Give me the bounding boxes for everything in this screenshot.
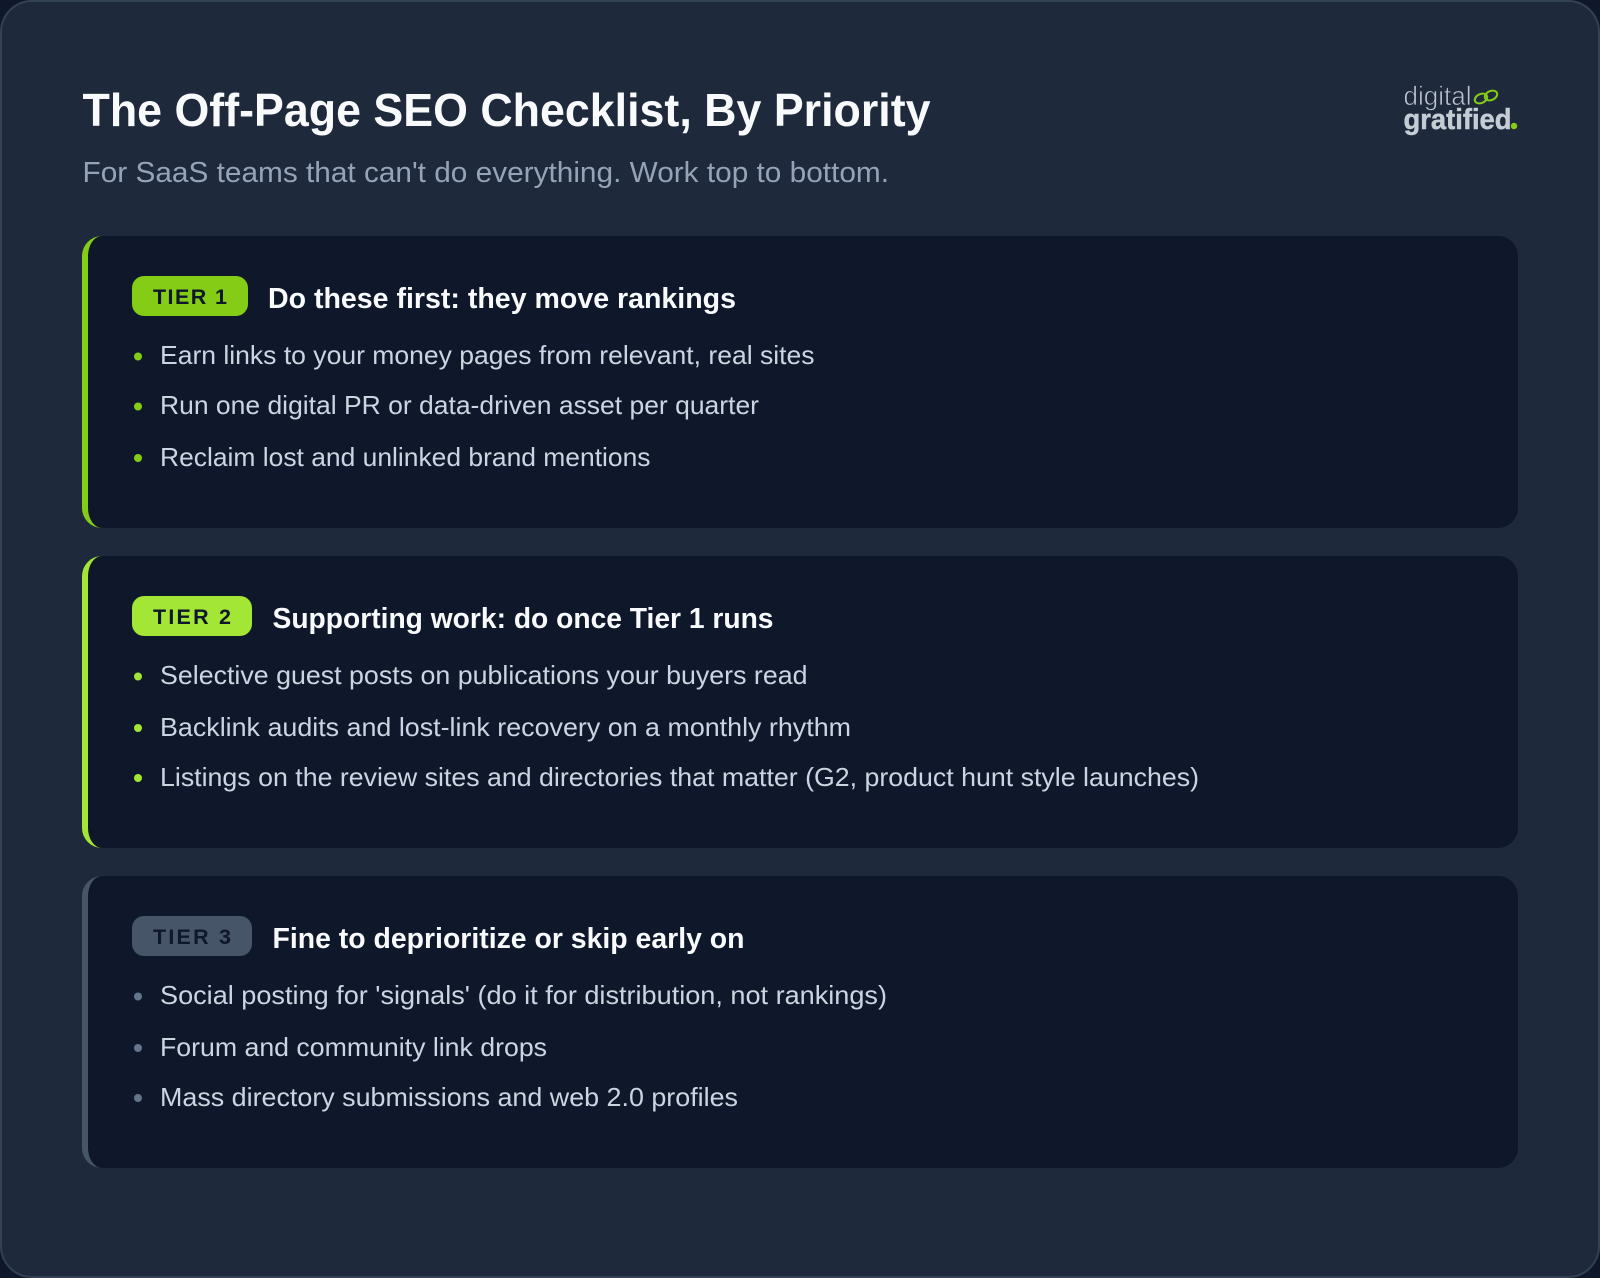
- card background: [88, 236, 1518, 528]
- badge: tier 3: [132, 916, 252, 956]
- list: tier 1: Run one digital PR or data-driven asset per quarter: [160, 390, 759, 420]
- panel: tier 3: [82, 876, 1518, 1168]
- heading: tier 1: Do these first: they move rankings: [268, 283, 736, 315]
- card accent: [82, 876, 102, 1168]
- list: tier 1: [134, 340, 814, 472]
- list: tier 3: Forum and community link drops: [160, 1032, 547, 1062]
- logo: digital gratified: [1404, 81, 1517, 136]
- list: tier 3: [134, 980, 887, 1112]
- card background: [88, 876, 1518, 1168]
- badge: tier 3: TIER 3: [153, 925, 231, 949]
- header: [82, 84, 931, 189]
- badge: tier 1: [132, 276, 248, 316]
- list: tier 2: Selective guest posts on publications your buyers read: [160, 660, 808, 690]
- list: tier 2: Backlink audits and lost-link recovery on a monthly rhythm: [160, 712, 851, 742]
- list: tier 2: [134, 660, 1199, 792]
- list: tier 1: Earn links to your money pages from relevant, real sites: [160, 340, 814, 370]
- badge: tier 2: [132, 596, 252, 636]
- card accent: [82, 556, 102, 848]
- logo word: digital: digital: [1404, 81, 1472, 111]
- logo word: gratified: gratified: [1404, 104, 1512, 136]
- badge: tier 2: TIER 2: [153, 605, 231, 629]
- list: tier 2: Listings on the review sites and directories that matter (G2, product hunt style launches): [160, 762, 1199, 792]
- badge: tier 1: TIER 1: [153, 285, 227, 309]
- panel: tier 1: [82, 236, 1518, 528]
- list: tier 3: Mass directory submissions and web 2.0 profiles: [160, 1082, 738, 1112]
- logo dot: [1511, 123, 1517, 129]
- subtitle: For SaaS teams that can't do everything. Work top to bottom.: [82, 157, 889, 189]
- card background: [88, 556, 1518, 848]
- panel: tier 2: [82, 556, 1518, 848]
- heading: tier 2: Supporting work: do once Tier 1 runs: [272, 603, 774, 635]
- list: tier 3: Social posting for 'signals' (do it for distribution, not rankings): [160, 980, 887, 1010]
- list: tier 1: Reclaim lost and unlinked brand mentions: [160, 442, 650, 472]
- icon: chain link: [1473, 89, 1499, 105]
- title: The Off-Page SEO Checklist, By Priority: [82, 84, 931, 136]
- heading: tier 3: Fine to deprioritize or skip early on: [272, 923, 744, 955]
- card accent: [82, 236, 102, 528]
